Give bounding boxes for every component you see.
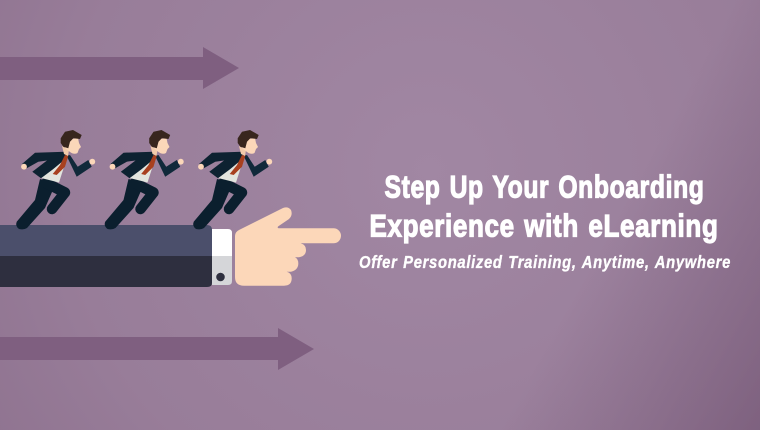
- runner 3: [193, 130, 272, 229]
- runner 2: [105, 130, 184, 229]
- runner 1: [16, 130, 95, 229]
- pointing hand: [235, 207, 341, 286]
- arrow: top: [0, 47, 239, 89]
- arrow: bottom: [0, 328, 314, 370]
- title: [370, 168, 718, 244]
- shirt cuff: [212, 229, 232, 285]
- sleeve: [0, 225, 212, 287]
